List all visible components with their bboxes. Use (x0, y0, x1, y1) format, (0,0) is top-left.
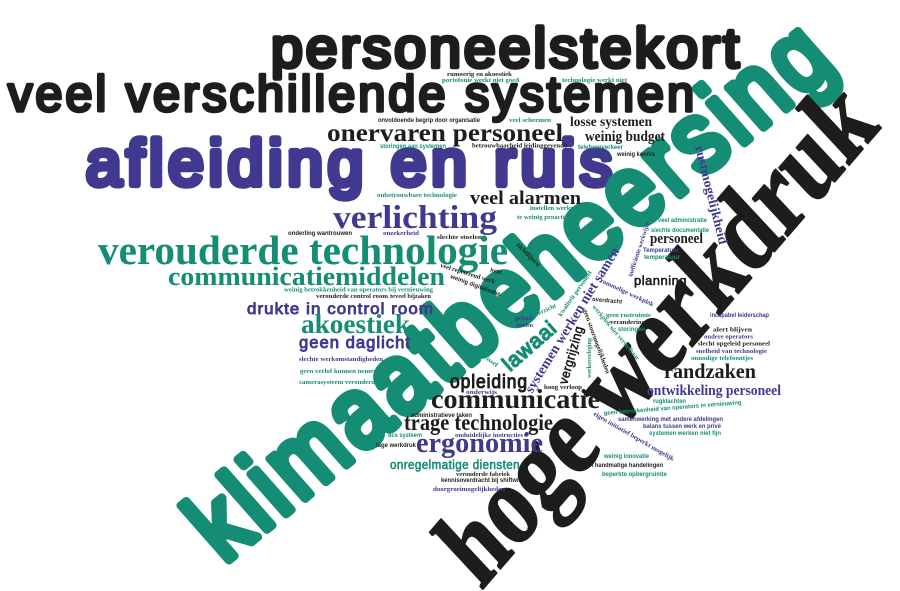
word: akoestiek: akoestiek (301, 309, 410, 339)
word: onzekerheid: onzekerheid (383, 230, 419, 237)
word: hvac: hvac (490, 268, 503, 276)
word: losse systemen: losse systemen (570, 115, 652, 130)
word: systemen werken niet fijn: systemen werken niet fijn (649, 431, 721, 437)
word: slechte documentatie: slechte documentatie (651, 228, 710, 234)
word: samenwerking met andere afdelingen: samenwerking met andere afdelingen (618, 417, 723, 423)
word: personeelstekort: personeelstekort (271, 16, 742, 79)
word: dienstwissel: dienstwissel (466, 342, 499, 369)
word: verouderde control room: verouderde control room (316, 293, 389, 300)
word: verouderde fabriek: verouderde fabriek (456, 471, 510, 478)
word: communicatie: communicatie (431, 384, 600, 414)
word: onderling wantrouwen: onderling wantrouwen (288, 231, 352, 237)
word: rommelige werkplek: rommelige werkplek (599, 277, 655, 308)
word: randzaken: randzaken (664, 359, 756, 383)
word: storingen aan systemen: storingen aan systemen (380, 144, 446, 150)
word: ergonomie: ergonomie (416, 428, 543, 459)
word: veel repeterend werk: veel repeterend werk (439, 262, 496, 286)
word: snelheid van technologie: snelheid van technologie (696, 348, 767, 355)
word: beperkte opbergruimte: beperkte opbergruimte (602, 472, 668, 478)
word: weinig kennis: weinig kennis (616, 152, 656, 158)
word: weinig innovatie: weinig innovatie (603, 454, 650, 460)
word: vergrijzing: vergrijzing (555, 324, 586, 386)
word: kwaliteit personeel: kwaliteit personeel (557, 270, 594, 318)
word: inefficiente werkwijze: inefficiënte werkwijze (627, 221, 652, 278)
word: rugklachten: rugklachten (653, 399, 686, 405)
word: veel verschillende systemen: veel verschillende systemen (8, 66, 697, 122)
word: rustmogelijkheid: rustmogelijkheid (692, 144, 731, 247)
word: onervaren personeel: onervaren personeel (327, 120, 563, 147)
word: incapabel leiderschap: incapabel leiderschap (710, 313, 769, 319)
word: veel alarmen: veel alarmen (470, 188, 581, 209)
word: rumoerig en akoestiek: rumoerig en akoestiek (447, 71, 512, 78)
word: planning: planning (634, 273, 687, 288)
word: Temperatuur: Temperatuur (643, 248, 680, 254)
word: doorgroeimogelijkheden: doorgroeimogelijkheden (433, 486, 505, 493)
word: geen rustruimte: geen rustruimte (606, 312, 651, 319)
word: telefoonverkeer: telefoonverkeer (578, 145, 624, 151)
word: geen daglicht: geen daglicht (299, 334, 411, 352)
word: betrouwbaarheid leidinggevende: betrouwbaarheid leidinggevende (472, 142, 567, 150)
word: afleiding en ruis: afleiding en ruis (86, 127, 617, 199)
word: onnodige telefoontjes: onnodige telefoontjes (691, 355, 753, 362)
word: dcs systeem: dcs systeem (388, 433, 422, 439)
word: veel administratie: veel administratie (658, 218, 708, 224)
word: geen stuurmogelijkheden: geen stuurmogelijkheden (581, 308, 611, 375)
word: stoelen: stoelen (516, 322, 533, 329)
word: weinig digitalisatie: weinig digitalisatie (448, 274, 502, 298)
word: werkoverleg: werkoverleging (586, 337, 593, 378)
word: slechte stoelen: slechte stoelen (437, 234, 482, 241)
word: geluid: geluid (515, 315, 532, 322)
word: eigen initiatief beperkt mogelijk: eigen initiatief beperkt mogelijk (592, 411, 676, 463)
word: overzicht: overzicht (531, 302, 558, 320)
word: overdracht: overdracht (592, 297, 622, 306)
word: onvoldoende begrip door organisatie: onvoldoende begrip door organisatie (378, 118, 481, 124)
word: administratieve taken: administratieve taken (411, 413, 472, 419)
word: alert blijven: alert blijven (713, 326, 752, 334)
word: slecht opgeleid personeel: slecht opgeleid personeel (698, 340, 770, 348)
word: onbetrouwbare technologie: onbetrouwbare technologie (377, 192, 457, 199)
word: veel handmatige handelingen: veel handmatige handelingen (582, 463, 663, 469)
word: onderwijs: onderwijs (466, 389, 498, 396)
word: camerasysteem verouderd: camerasysteem verouderd (299, 379, 375, 386)
word: slechte werkomstandigheden: slechte werkomstandigheden (299, 356, 383, 363)
word: opleiding: opleiding (450, 372, 528, 393)
word: kennisoverdracht bij shiftwissel: kennisoverdracht bij shiftwissel (441, 478, 530, 484)
word: personeel: personeel (650, 231, 703, 247)
word: geen betrokkenheid van operators in vernieuwing: geen betrokkenheid van operators in vernieuwing (604, 400, 742, 417)
word: communicatiemiddelen: communicatiemiddelen (168, 262, 446, 291)
word: ontwikkeling personeel: ontwikkeling personeel (647, 383, 781, 399)
word: veel schermen: veel schermen (509, 117, 551, 124)
word: onduidelijke instructies: onduidelijke instructies (455, 432, 523, 439)
word: systemen werken niet samen: systemen werken niet samen (523, 245, 623, 396)
word: verouderde technologie: verouderde technologie (98, 227, 508, 273)
word: trage technologie: trage technologie (404, 410, 553, 435)
word: portofonie werkt niet goed: portofonie werkt niet goed (442, 77, 519, 84)
word: balans tussen werk en prive: balans tussen werk en privé (643, 424, 722, 430)
word: instellen werkplek: instellen werkplek (530, 205, 583, 212)
word: technologie werkt niet: technologie werkt niet (562, 77, 628, 84)
word: lage werkdruk: lage werkdruk (376, 443, 417, 449)
word: lawaai: lawaai (498, 316, 562, 376)
word: zichtlijnen: zichtlijnen (515, 241, 542, 269)
word: hoog verloop: hoog verloop (544, 384, 582, 391)
word: te weinig proactief: te weinig proactief (517, 214, 571, 221)
word: teveel bijzaken: teveel bijzaken (390, 293, 431, 300)
word: verlichting: verlichting (333, 200, 498, 236)
word: geen verlof kunnen nemen: geen verlof kunnen nemen (300, 368, 377, 375)
dot (524, 433, 528, 437)
word: drukte in control room: drukte in control room (247, 301, 434, 318)
word: storingen: storingen (618, 327, 645, 333)
word: weinig budget: weinig budget (585, 129, 665, 145)
word: weinig betrokkenheid van operators bij vernieuwing: weinig betrokkenheid van operators bij vernieuwing (284, 286, 434, 294)
word: oudere operators: oudere operators (704, 334, 753, 340)
word: werkplek niet verstelbaar: werkplek niet verstelbaar (590, 304, 641, 362)
word: temperatuur: temperatuur (644, 255, 681, 261)
word: verandering: verandering (610, 319, 646, 326)
word: onregelmatige diensten: onregelmatige diensten (390, 457, 520, 472)
